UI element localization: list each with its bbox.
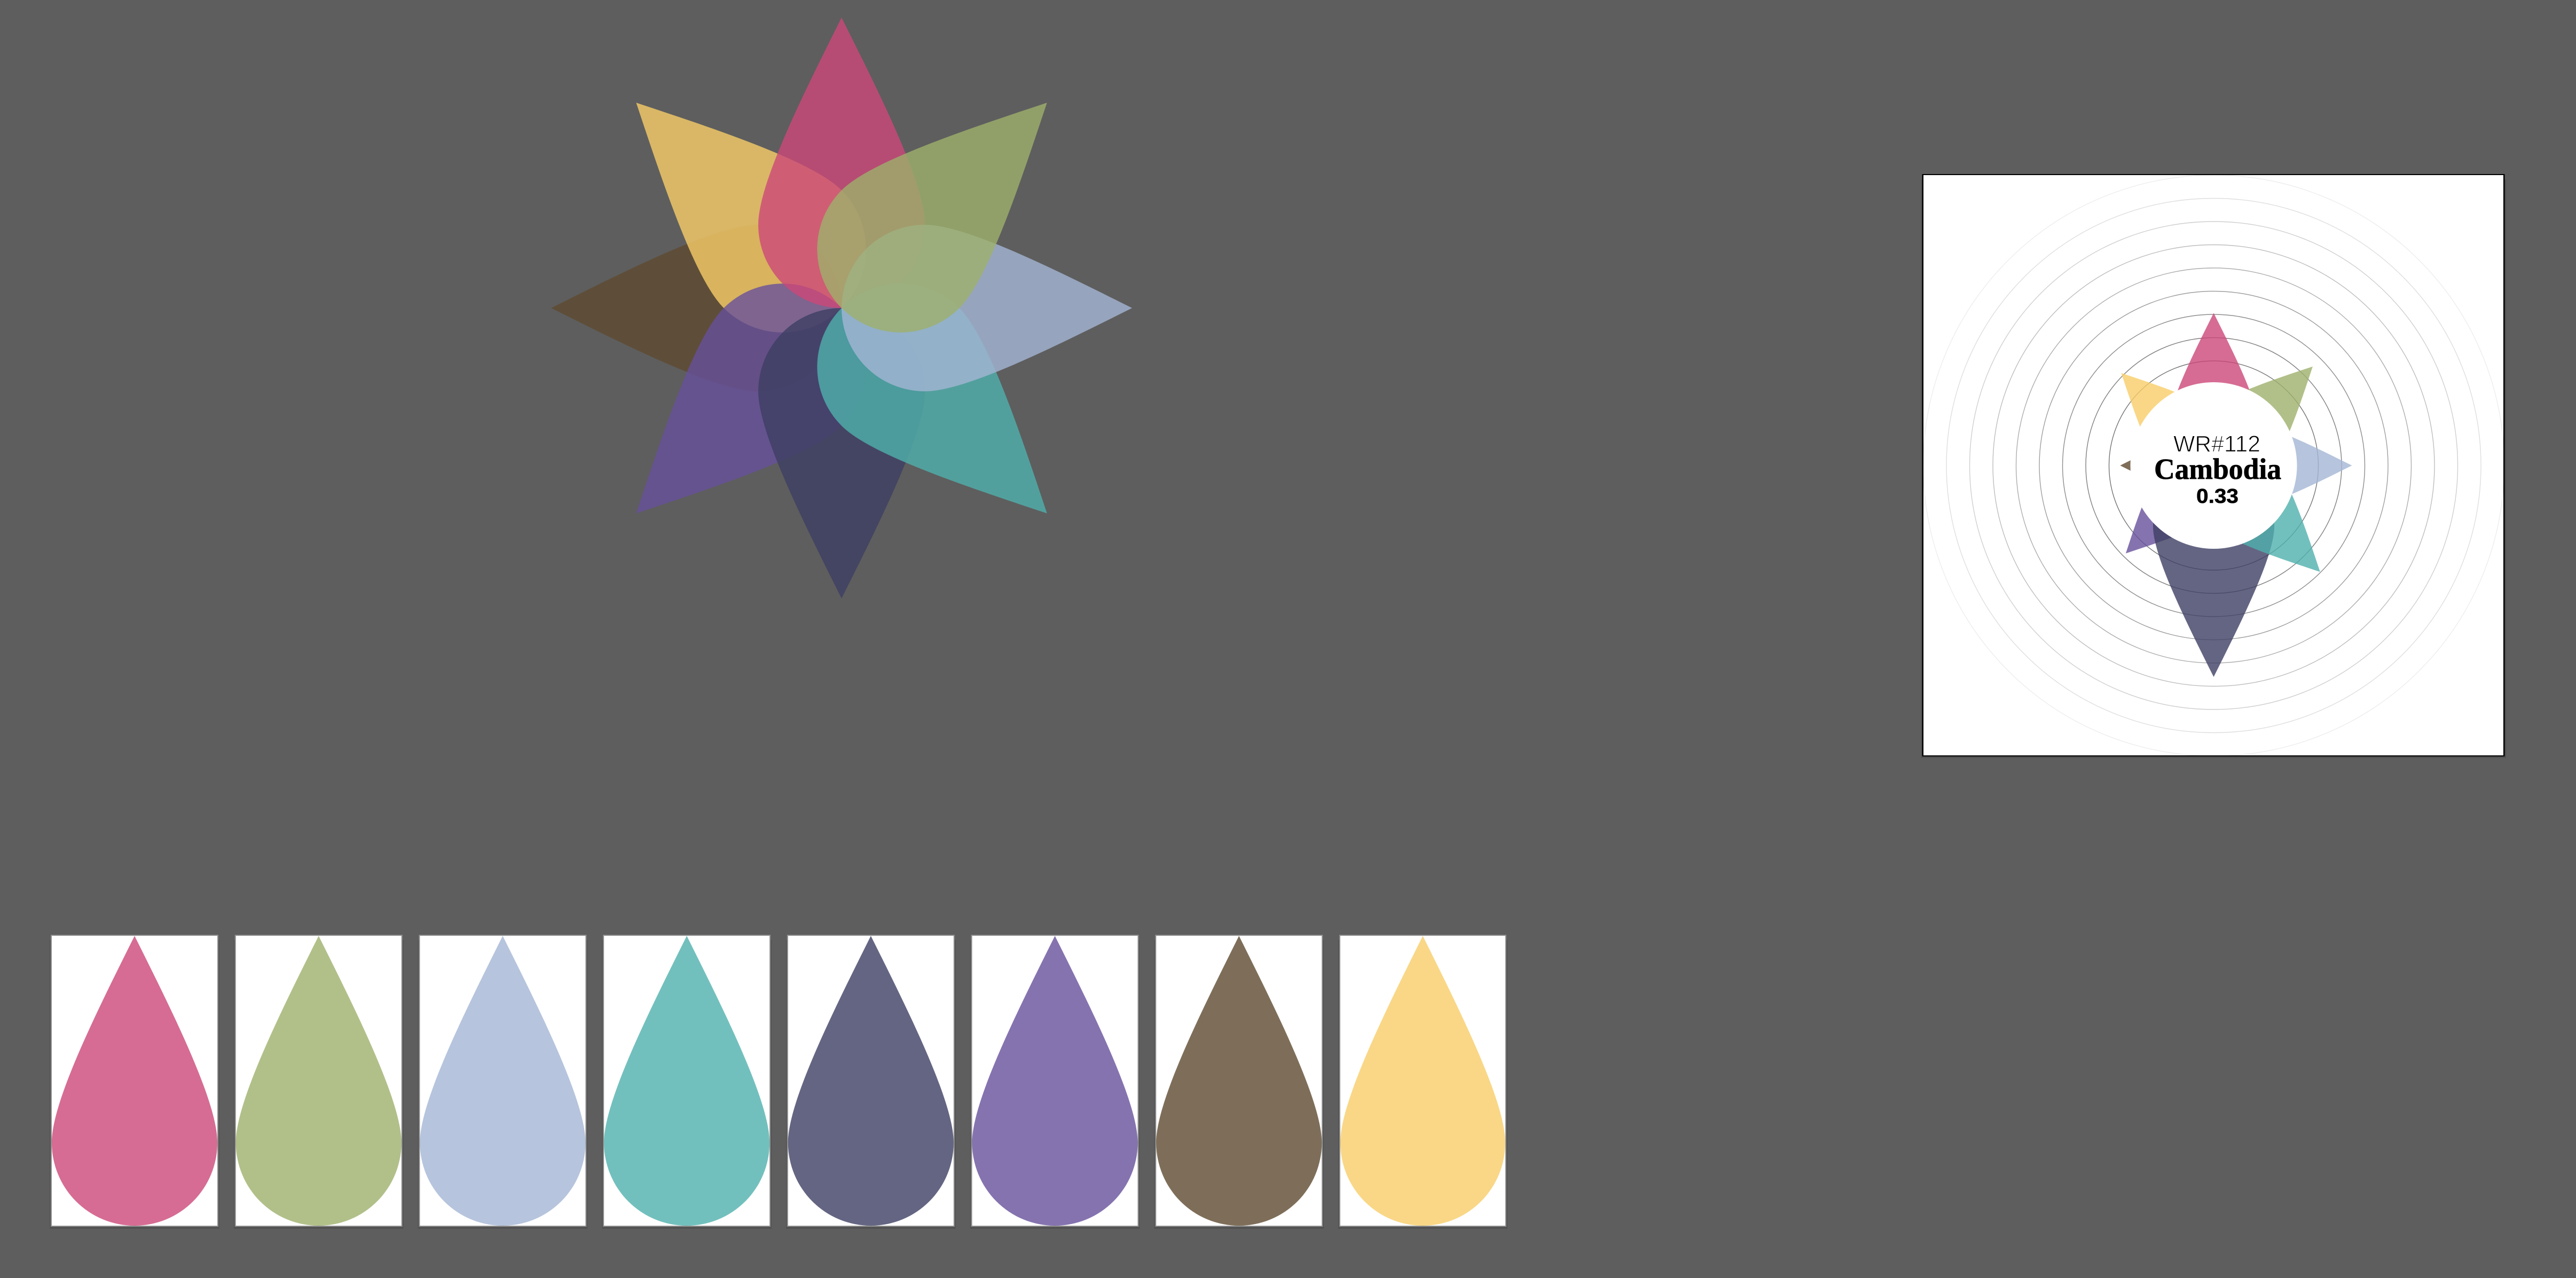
concentric scale rings <box>1923 175 2504 756</box>
swatch card: navy <box>786 935 956 1229</box>
radial star of eight overlapping petals <box>551 18 1132 598</box>
swatch card: purple <box>970 935 1140 1229</box>
petal: yellow, pointing upper left <box>577 44 900 367</box>
petal: teal, pointing lower right <box>783 249 1106 572</box>
petal: navy, largest value <box>2153 466 2274 677</box>
petal: navy, pointing down <box>758 308 925 598</box>
petal: purple, pointing lower left <box>577 249 900 572</box>
swatch card: pink <box>50 935 219 1229</box>
centre white disc <box>2131 382 2297 549</box>
swatch card: olive <box>234 935 403 1229</box>
swatch card: teal <box>602 935 772 1229</box>
petal: pale blue, pointing right <box>842 225 1132 391</box>
petal: purple <box>2101 440 2239 579</box>
country name: Cambodia <box>2154 453 2281 485</box>
petal: teal <box>2183 435 2351 602</box>
score value: 0.33 <box>2196 485 2239 508</box>
petal: brown, pointing left <box>551 225 842 391</box>
panel: country chart for Cambodia <box>1921 174 2506 758</box>
petal: pale blue <box>2214 426 2352 505</box>
swatch card: yellow <box>1338 935 1507 1229</box>
petal: olive, pointing upper right <box>783 44 1106 367</box>
petal: pink <box>2170 313 2257 466</box>
scaled petals <box>2095 313 2352 677</box>
rank label: WR#112 <box>2173 431 2260 457</box>
petal: olive <box>2185 338 2341 494</box>
swatch card: pale blue <box>418 935 587 1229</box>
petal: yellow <box>2095 346 2240 492</box>
petal: pink, pointing up <box>758 18 925 308</box>
swatch card: brown <box>1155 935 1324 1229</box>
petal: brown, value small <box>2120 439 2214 492</box>
